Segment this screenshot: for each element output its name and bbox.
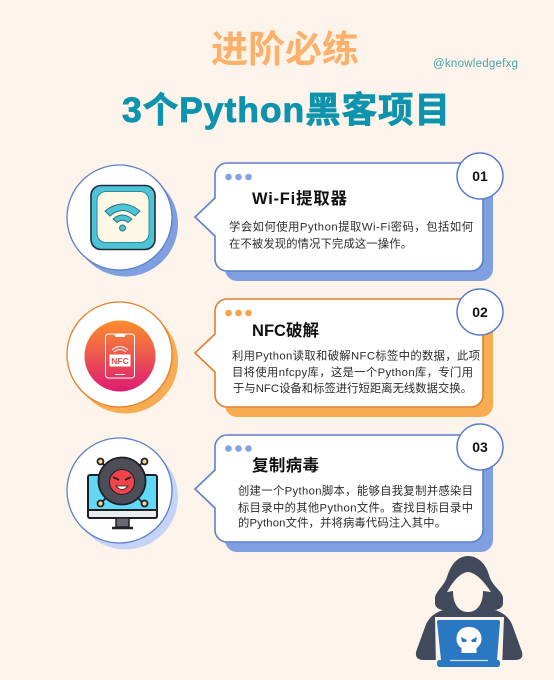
card body text <box>238 484 473 530</box>
panel: Wi-Fi extractor <box>67 153 503 281</box>
card heading: Wi-Fi提取器 <box>252 189 348 208</box>
card heading: 复制病毒 <box>252 455 319 475</box>
card body text <box>229 220 473 250</box>
number badge 03 <box>457 424 503 470</box>
number badge 01 <box>457 153 503 199</box>
icon: hooded hacker with laptop <box>416 556 522 669</box>
title: 进阶必练: 进阶必练 <box>211 29 359 70</box>
dots <box>225 445 252 452</box>
heading: 3个Python黑客项目: 3个Python黑客项目 <box>122 90 450 130</box>
icon: NFC phone <box>84 320 156 392</box>
icon: NFC phone: NFC <box>111 356 129 366</box>
card body text: 在不被发现的情况下完成这一操作。 <box>229 236 412 250</box>
card shadow <box>225 310 493 417</box>
handle: @knowledgefxg: @knowledgefxg <box>433 58 518 70</box>
card body text: 标目录中的其他Python文件。查找目标目录中 <box>238 500 473 514</box>
card body text: 学会如何使用Python提取Wi-Fi密码，包括如何 <box>229 220 473 234</box>
card body text: 的Python文件，并将病毒代码注入其中。 <box>238 516 446 530</box>
number badge 01: 01 <box>472 168 488 184</box>
icon: virus on monitor <box>88 458 157 528</box>
icon circle with shadow <box>67 438 178 550</box>
number badge 02 <box>457 289 503 335</box>
card heading: NFC破解 <box>252 321 319 340</box>
card body text: 目将使用nfcpy库，这是一个Python库，专门用 <box>232 365 473 379</box>
panel: self-replicating virus <box>67 424 503 552</box>
card body text: 利用Python读取和破解NFC标签中的数据，此项 <box>232 348 480 362</box>
dots <box>225 174 252 180</box>
dots <box>225 310 252 316</box>
icon circle with shadow <box>67 165 178 276</box>
icon circle with shadow <box>67 302 178 414</box>
number badge 02: 02 <box>472 304 488 320</box>
speech bubble card <box>195 435 483 542</box>
card body text <box>232 348 480 395</box>
speech bubble card <box>195 163 483 271</box>
speech bubble card <box>195 299 483 407</box>
card shadow <box>225 446 493 552</box>
card body text: 于与NFC设备和标签进行短距离无线数据交换。 <box>233 381 472 395</box>
panel: NFC crack <box>67 289 503 417</box>
icon: wifi <box>91 186 155 250</box>
card body text: 创建一个Python脚本，能够自我复制并感染目 <box>238 484 473 498</box>
number badge 03: 03 <box>472 439 488 455</box>
card shadow <box>225 174 493 281</box>
